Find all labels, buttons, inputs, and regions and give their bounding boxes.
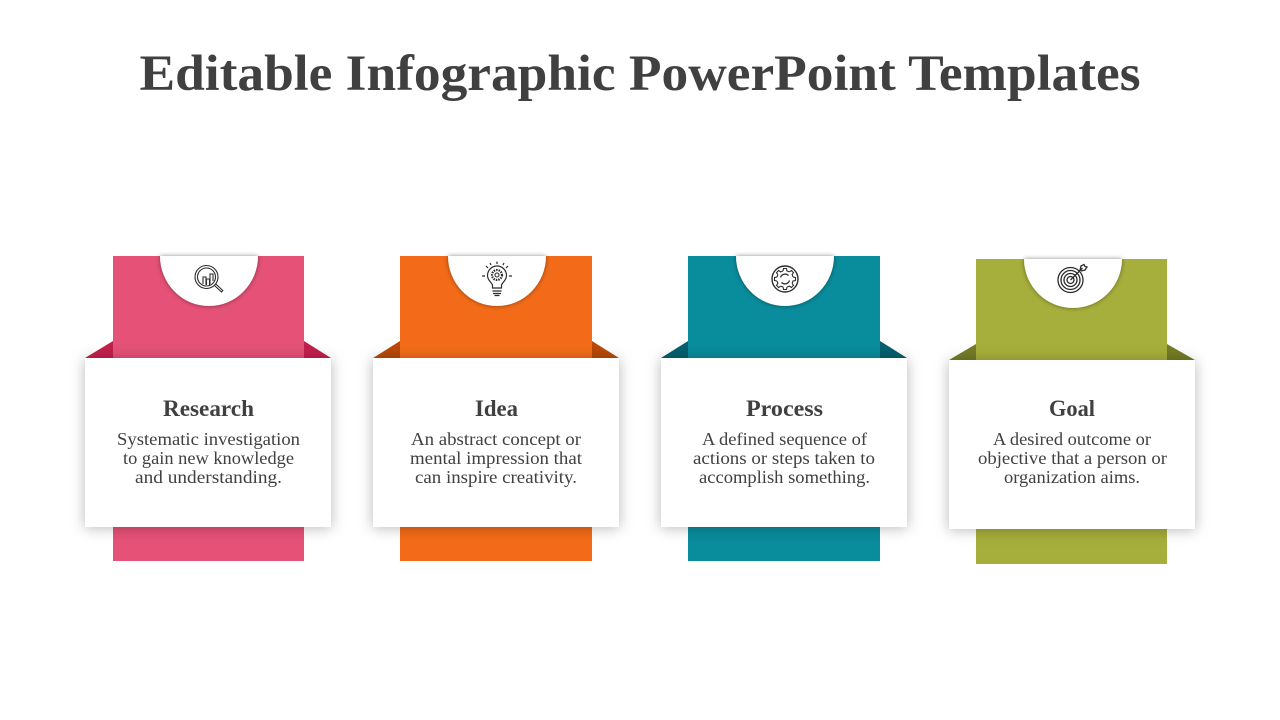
- icon: magnifier with chart: [195, 266, 223, 292]
- idea description: mental impression that: [410, 448, 582, 468]
- title: Editable Infographic PowerPoint Templates: [140, 46, 1140, 102]
- research semicircle tab: [160, 256, 258, 306]
- goal ribbon: [976, 259, 1167, 564]
- research right fold: [304, 341, 331, 358]
- research card: [85, 358, 331, 527]
- process description: [693, 429, 875, 487]
- icon: gear with cycle arrows: [772, 266, 798, 292]
- research description: and understanding.: [135, 467, 282, 487]
- goal left fold: [949, 344, 976, 360]
- process semicircle tab: [736, 256, 834, 306]
- idea description: can inspire creativity.: [415, 467, 577, 487]
- process heading: Process: [746, 396, 823, 421]
- process left fold: [661, 341, 688, 358]
- panel: goal: [949, 259, 1195, 564]
- research ribbon: [113, 256, 304, 561]
- idea left fold: [373, 341, 400, 358]
- goal heading: Goal: [1049, 396, 1095, 421]
- goal description: [978, 429, 1167, 487]
- research description: [117, 429, 300, 487]
- panel: idea: [373, 256, 619, 561]
- idea semicircle tab: [448, 256, 546, 306]
- goal description: A desired outcome or: [993, 429, 1151, 449]
- process description: accomplish something.: [699, 467, 870, 487]
- research left fold: [85, 341, 113, 358]
- process card: [661, 358, 907, 527]
- goal right fold: [1167, 344, 1195, 360]
- goal description: organization aims.: [1004, 467, 1140, 487]
- idea ribbon: [400, 256, 592, 561]
- idea card: [373, 358, 619, 527]
- process right fold: [880, 341, 907, 358]
- research heading: Research: [163, 396, 254, 421]
- panel: process: [661, 256, 907, 561]
- research description: Systematic investigation: [117, 429, 300, 449]
- idea description: [410, 429, 582, 487]
- idea heading: Idea: [475, 396, 518, 421]
- panel: research: [85, 256, 331, 561]
- idea right fold: [592, 341, 619, 358]
- research description: to gain new knowledge: [123, 448, 294, 468]
- process ribbon: [688, 256, 880, 561]
- icon: light bulb with gear: [482, 262, 512, 296]
- goal semicircle tab: [1024, 259, 1122, 308]
- idea description: An abstract concept or: [411, 429, 581, 449]
- process description: actions or steps taken to: [693, 448, 875, 468]
- goal description: objective that a person or: [978, 448, 1167, 468]
- goal card: [949, 360, 1195, 529]
- icon: target with arrow: [1058, 264, 1087, 292]
- process description: A defined sequence of: [702, 429, 867, 449]
